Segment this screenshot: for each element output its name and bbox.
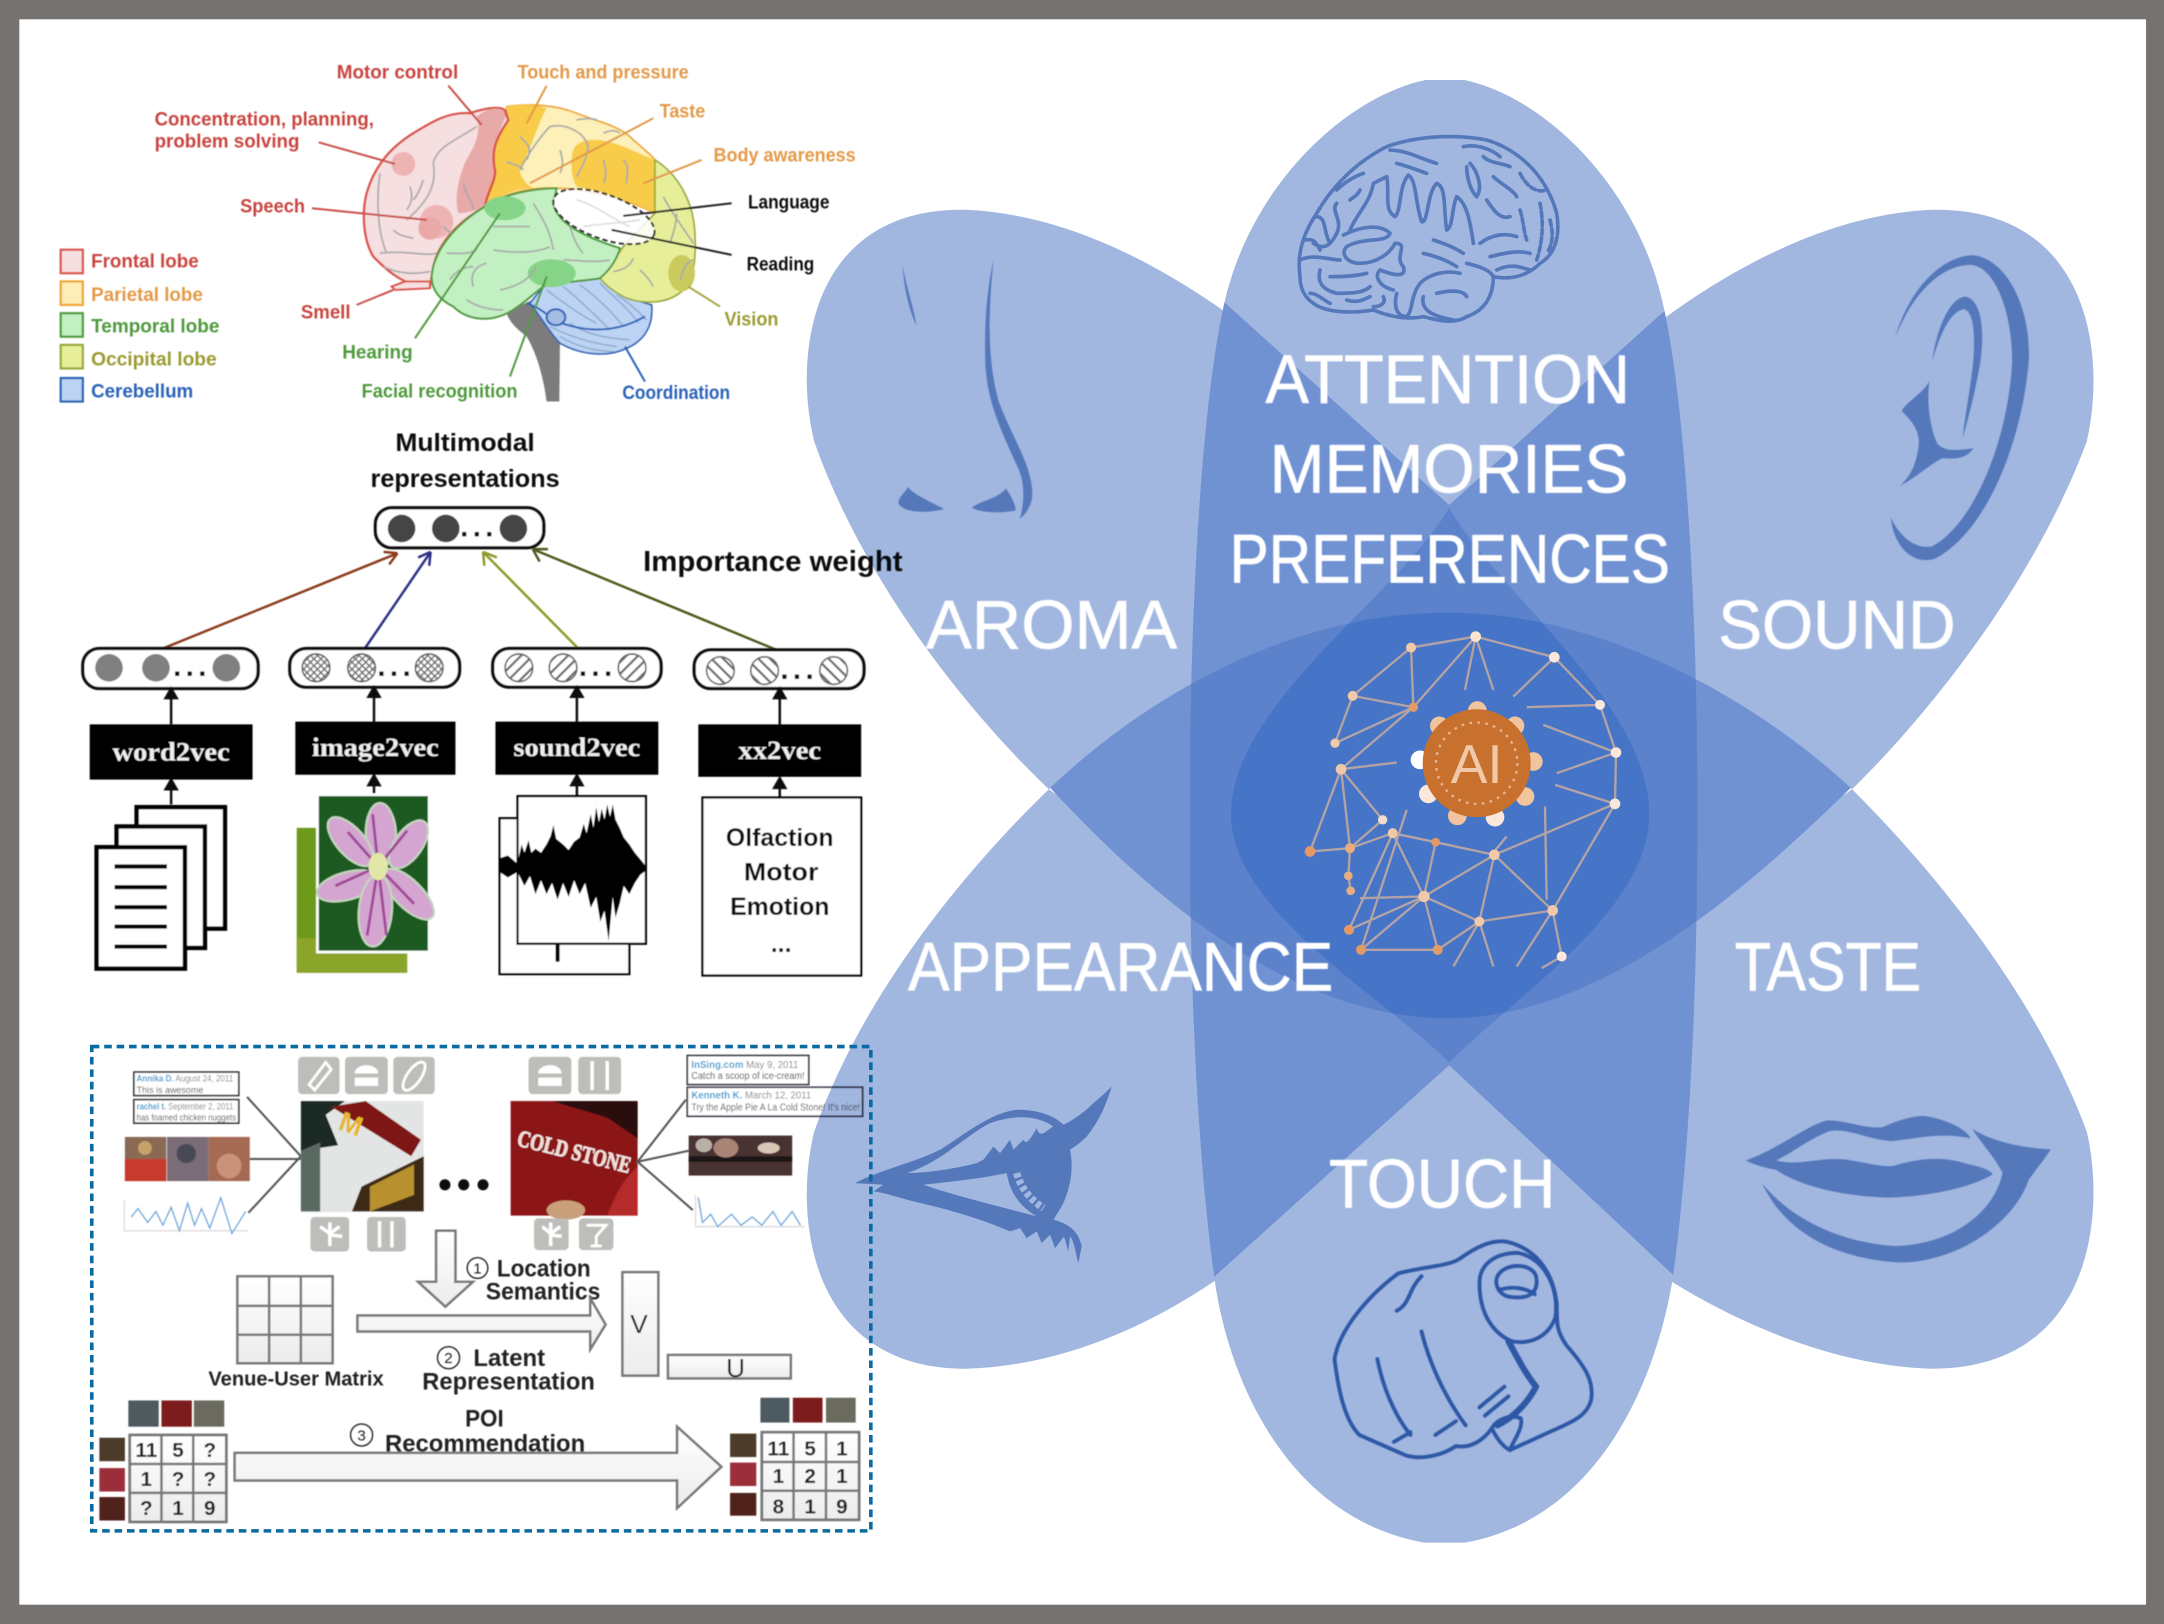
factor U	[668, 1353, 791, 1383]
input rating matrix: ?	[140, 1497, 153, 1520]
icon: eye	[855, 1086, 1112, 1263]
encoder: image2vec: image2vec	[312, 733, 439, 762]
right activity chart	[696, 1195, 805, 1227]
dashed frame of POI panel	[92, 1047, 871, 1531]
input vector: other	[694, 650, 864, 689]
petal: aroma	[807, 210, 1449, 789]
top vector	[375, 508, 544, 548]
image: sound waveform	[500, 796, 646, 974]
output rating matrix: 1	[836, 1465, 848, 1488]
input vector: other: ...	[780, 653, 818, 686]
overlap: central darkest zone	[1231, 612, 1650, 1018]
factor U: U	[726, 1353, 745, 1383]
network nodes	[1305, 631, 1621, 961]
output matrix photos	[730, 1398, 856, 1516]
label: latent representation: 2	[444, 1350, 453, 1367]
input rating matrix: ?	[172, 1468, 184, 1491]
left activity chart	[124, 1198, 248, 1234]
input rating matrix: 9	[204, 1497, 216, 1520]
weighted arrows	[163, 549, 780, 651]
brain function labels: Concentration, planning,	[155, 110, 374, 131]
input vector: word: ...	[173, 650, 211, 683]
photo: Cold Stone storefront	[511, 1101, 638, 1220]
brain function labels: Smell	[301, 303, 351, 324]
importance weight label: Importance weight	[643, 546, 903, 578]
input rating matrix: 1	[172, 1497, 184, 1520]
output rating matrix: 1	[773, 1465, 784, 1488]
text labels in petals: SOUND	[1718, 587, 1956, 663]
output rating matrix: 8	[773, 1496, 784, 1519]
category icons: right bottom	[534, 1218, 613, 1250]
lobe legend: Parietal lobe	[91, 285, 203, 306]
brain function labels: Coordination	[622, 383, 730, 404]
category icons: left top	[298, 1057, 435, 1094]
brain function labels: Speech	[240, 196, 305, 217]
output rating matrix: 2	[804, 1465, 816, 1488]
overlap: horizontal lens inside vertical petal	[1190, 622, 1698, 1014]
output rating matrix	[762, 1432, 859, 1520]
brain function labels	[155, 63, 856, 404]
brain illustration	[364, 105, 695, 402]
petal: appearance	[807, 789, 1449, 1369]
input vector: sound: ...	[579, 650, 616, 683]
input rating matrix: 5	[172, 1439, 184, 1462]
left venue reviews: has foamed chicken nuggets	[137, 1112, 236, 1122]
panel: brain lobes diagram	[61, 63, 856, 404]
input vector: sound	[493, 648, 661, 687]
right venue reviews: InSing.com May 9, 2011	[691, 1060, 798, 1071]
brain function labels: Language	[748, 192, 830, 213]
left venue reviews: This is awesome	[137, 1085, 203, 1095]
label: POI recommendation: 3	[357, 1427, 366, 1444]
AI gear	[1411, 701, 1543, 827]
photo: Cold Stone storefront: COLD STONE	[515, 1126, 633, 1179]
photo: McDonald's storefront	[301, 1101, 424, 1212]
encoder: word2vec: word2vec	[112, 737, 230, 766]
label: location semantics: Semantics	[486, 1279, 600, 1306]
box: other modalities: ...	[771, 931, 791, 958]
brain function labels: Touch and pressure	[518, 63, 689, 84]
category icons: right top	[529, 1057, 621, 1094]
encoder: word2vec	[90, 724, 253, 780]
encoder: xx2vec	[698, 724, 861, 777]
left venue reviews	[134, 1072, 239, 1123]
output rating matrix: 9	[836, 1496, 848, 1519]
leader lines	[312, 86, 732, 382]
label: latent representation: Representation	[422, 1368, 595, 1395]
input rating matrix: ?	[203, 1468, 216, 1491]
lobe legend: Occipital lobe	[91, 350, 217, 371]
box: other modalities: Emotion	[730, 894, 829, 921]
encoder: sound2vec	[495, 722, 658, 775]
right venue reviews	[687, 1056, 863, 1116]
text labels in petals: AROMA	[926, 587, 1177, 663]
box: other modalities: Olfaction	[726, 825, 834, 852]
left venue reviews: Annika D. August 24, 2011	[137, 1074, 233, 1084]
overlap: vertical lens	[1231, 508, 1649, 1062]
right connector lines	[638, 1100, 693, 1210]
petal: taste	[1449, 789, 2093, 1369]
left connector lines	[247, 1097, 301, 1213]
text labels in petals: ATTENTION	[1266, 341, 1630, 418]
input rating matrix: ?	[203, 1439, 216, 1462]
AI gear: AI	[1451, 733, 1503, 795]
lobe legend: Cerebellum	[91, 381, 193, 402]
ellipsis dots	[439, 1179, 489, 1190]
input vector: word	[83, 648, 258, 689]
icon: AI network head	[1305, 631, 1621, 968]
label: latent representation	[422, 1345, 595, 1395]
icon: brain	[1299, 137, 1558, 321]
petal: attention and touch	[1214, 80, 1672, 1543]
input rating matrix	[130, 1435, 226, 1522]
text labels in petals: APPEARANCE	[908, 929, 1333, 1006]
icon: pointing fist	[1335, 1241, 1592, 1457]
lobe legend: Frontal lobe	[91, 252, 199, 273]
heading: multimodal representations: Multimodal	[395, 430, 535, 457]
text labels in petals: TOUCH	[1329, 1145, 1555, 1222]
encoder: xx2vec: xx2vec	[738, 736, 821, 765]
output rating matrix: 5	[804, 1438, 816, 1461]
icon: document stack	[97, 807, 225, 969]
arrow: location semantics	[418, 1231, 473, 1307]
right venue reviews: Kenneth K. March 12, 2011	[691, 1090, 811, 1101]
label: POI recommendation: POI	[465, 1406, 504, 1433]
icon: nose	[898, 259, 1032, 519]
output rating matrix: 11	[767, 1438, 789, 1461]
brain function labels: Hearing	[342, 343, 413, 364]
factor V	[622, 1272, 658, 1376]
label: location semantics: Location	[497, 1255, 591, 1282]
box: other modalities: Motor	[744, 859, 819, 886]
panel: multimodal representations	[83, 430, 903, 976]
brain function labels: Reading	[747, 254, 814, 275]
network edges	[1310, 637, 1616, 968]
brain function labels: problem solving	[155, 132, 299, 153]
label: POI recommendation: Recommendation	[385, 1431, 585, 1458]
label: latent representation: Latent	[473, 1345, 545, 1372]
photo: McDonald's storefront: M	[335, 1105, 367, 1142]
box: other modalities	[702, 798, 861, 976]
label: location semantics	[467, 1255, 600, 1306]
petal: sound	[1449, 210, 2093, 789]
text labels in petals: TASTE	[1735, 929, 1921, 1006]
small vertical arrows	[166, 687, 785, 804]
panel: senses flower diagram	[807, 77, 2093, 1545]
image: flower photo	[297, 793, 442, 973]
output rating matrix: 1	[836, 1438, 848, 1461]
overlap: horizontal lens wings	[1050, 613, 1851, 1018]
arrow: POI recommendation	[235, 1427, 721, 1508]
text labels in petals	[908, 341, 1956, 1222]
brain function labels: Taste	[660, 101, 705, 122]
lobe legend: Temporal lobe	[91, 317, 220, 338]
label: POI recommendation	[351, 1406, 585, 1458]
label: location semantics: 1	[473, 1261, 482, 1278]
input vector: image: ...	[377, 650, 415, 683]
right venue reviews: Catch a scoop of ice-cream!	[691, 1071, 805, 1082]
input rating matrix: 11	[135, 1439, 157, 1462]
left venue reviews: rachel t. September 2, 2011	[137, 1101, 233, 1111]
panel: POI recommendation	[99, 1056, 863, 1522]
icon: lips	[1746, 1116, 2051, 1262]
encoder: image2vec	[295, 722, 455, 775]
venue-user matrix	[208, 1276, 384, 1390]
icon: ear	[1891, 255, 2029, 560]
heading: multimodal representations: representations	[371, 466, 560, 493]
brain function labels: Facial recognition	[362, 381, 518, 402]
brain function labels: Vision	[725, 310, 778, 331]
text labels in petals: PREFERENCES	[1230, 520, 1670, 597]
factor V: V	[630, 1309, 648, 1339]
arrow: latent representation	[357, 1298, 606, 1349]
top vector: ...	[460, 511, 498, 544]
right food photos	[689, 1136, 792, 1176]
encoder: sound2vec: sound2vec	[513, 733, 640, 762]
lobe legend	[61, 250, 220, 402]
left food photos	[125, 1137, 250, 1181]
input vector: image	[290, 648, 460, 687]
output rating matrix: 1	[804, 1496, 816, 1519]
text labels in petals: MEMORIES	[1270, 431, 1629, 508]
category icons: left bottom	[311, 1217, 406, 1251]
overlap band in the vertical petal	[1190, 302, 1696, 1277]
venue-user matrix: Venue-User Matrix	[208, 1368, 384, 1390]
brain function labels: Motor control	[337, 63, 458, 84]
input matrix photos	[99, 1400, 224, 1521]
right venue reviews: Try the Apple Pie A La Cold Stone! It's nice!	[691, 1103, 860, 1114]
brain function labels: Body awareness	[714, 145, 856, 166]
heading: multimodal representations	[371, 430, 560, 493]
input rating matrix: 1	[141, 1468, 152, 1491]
